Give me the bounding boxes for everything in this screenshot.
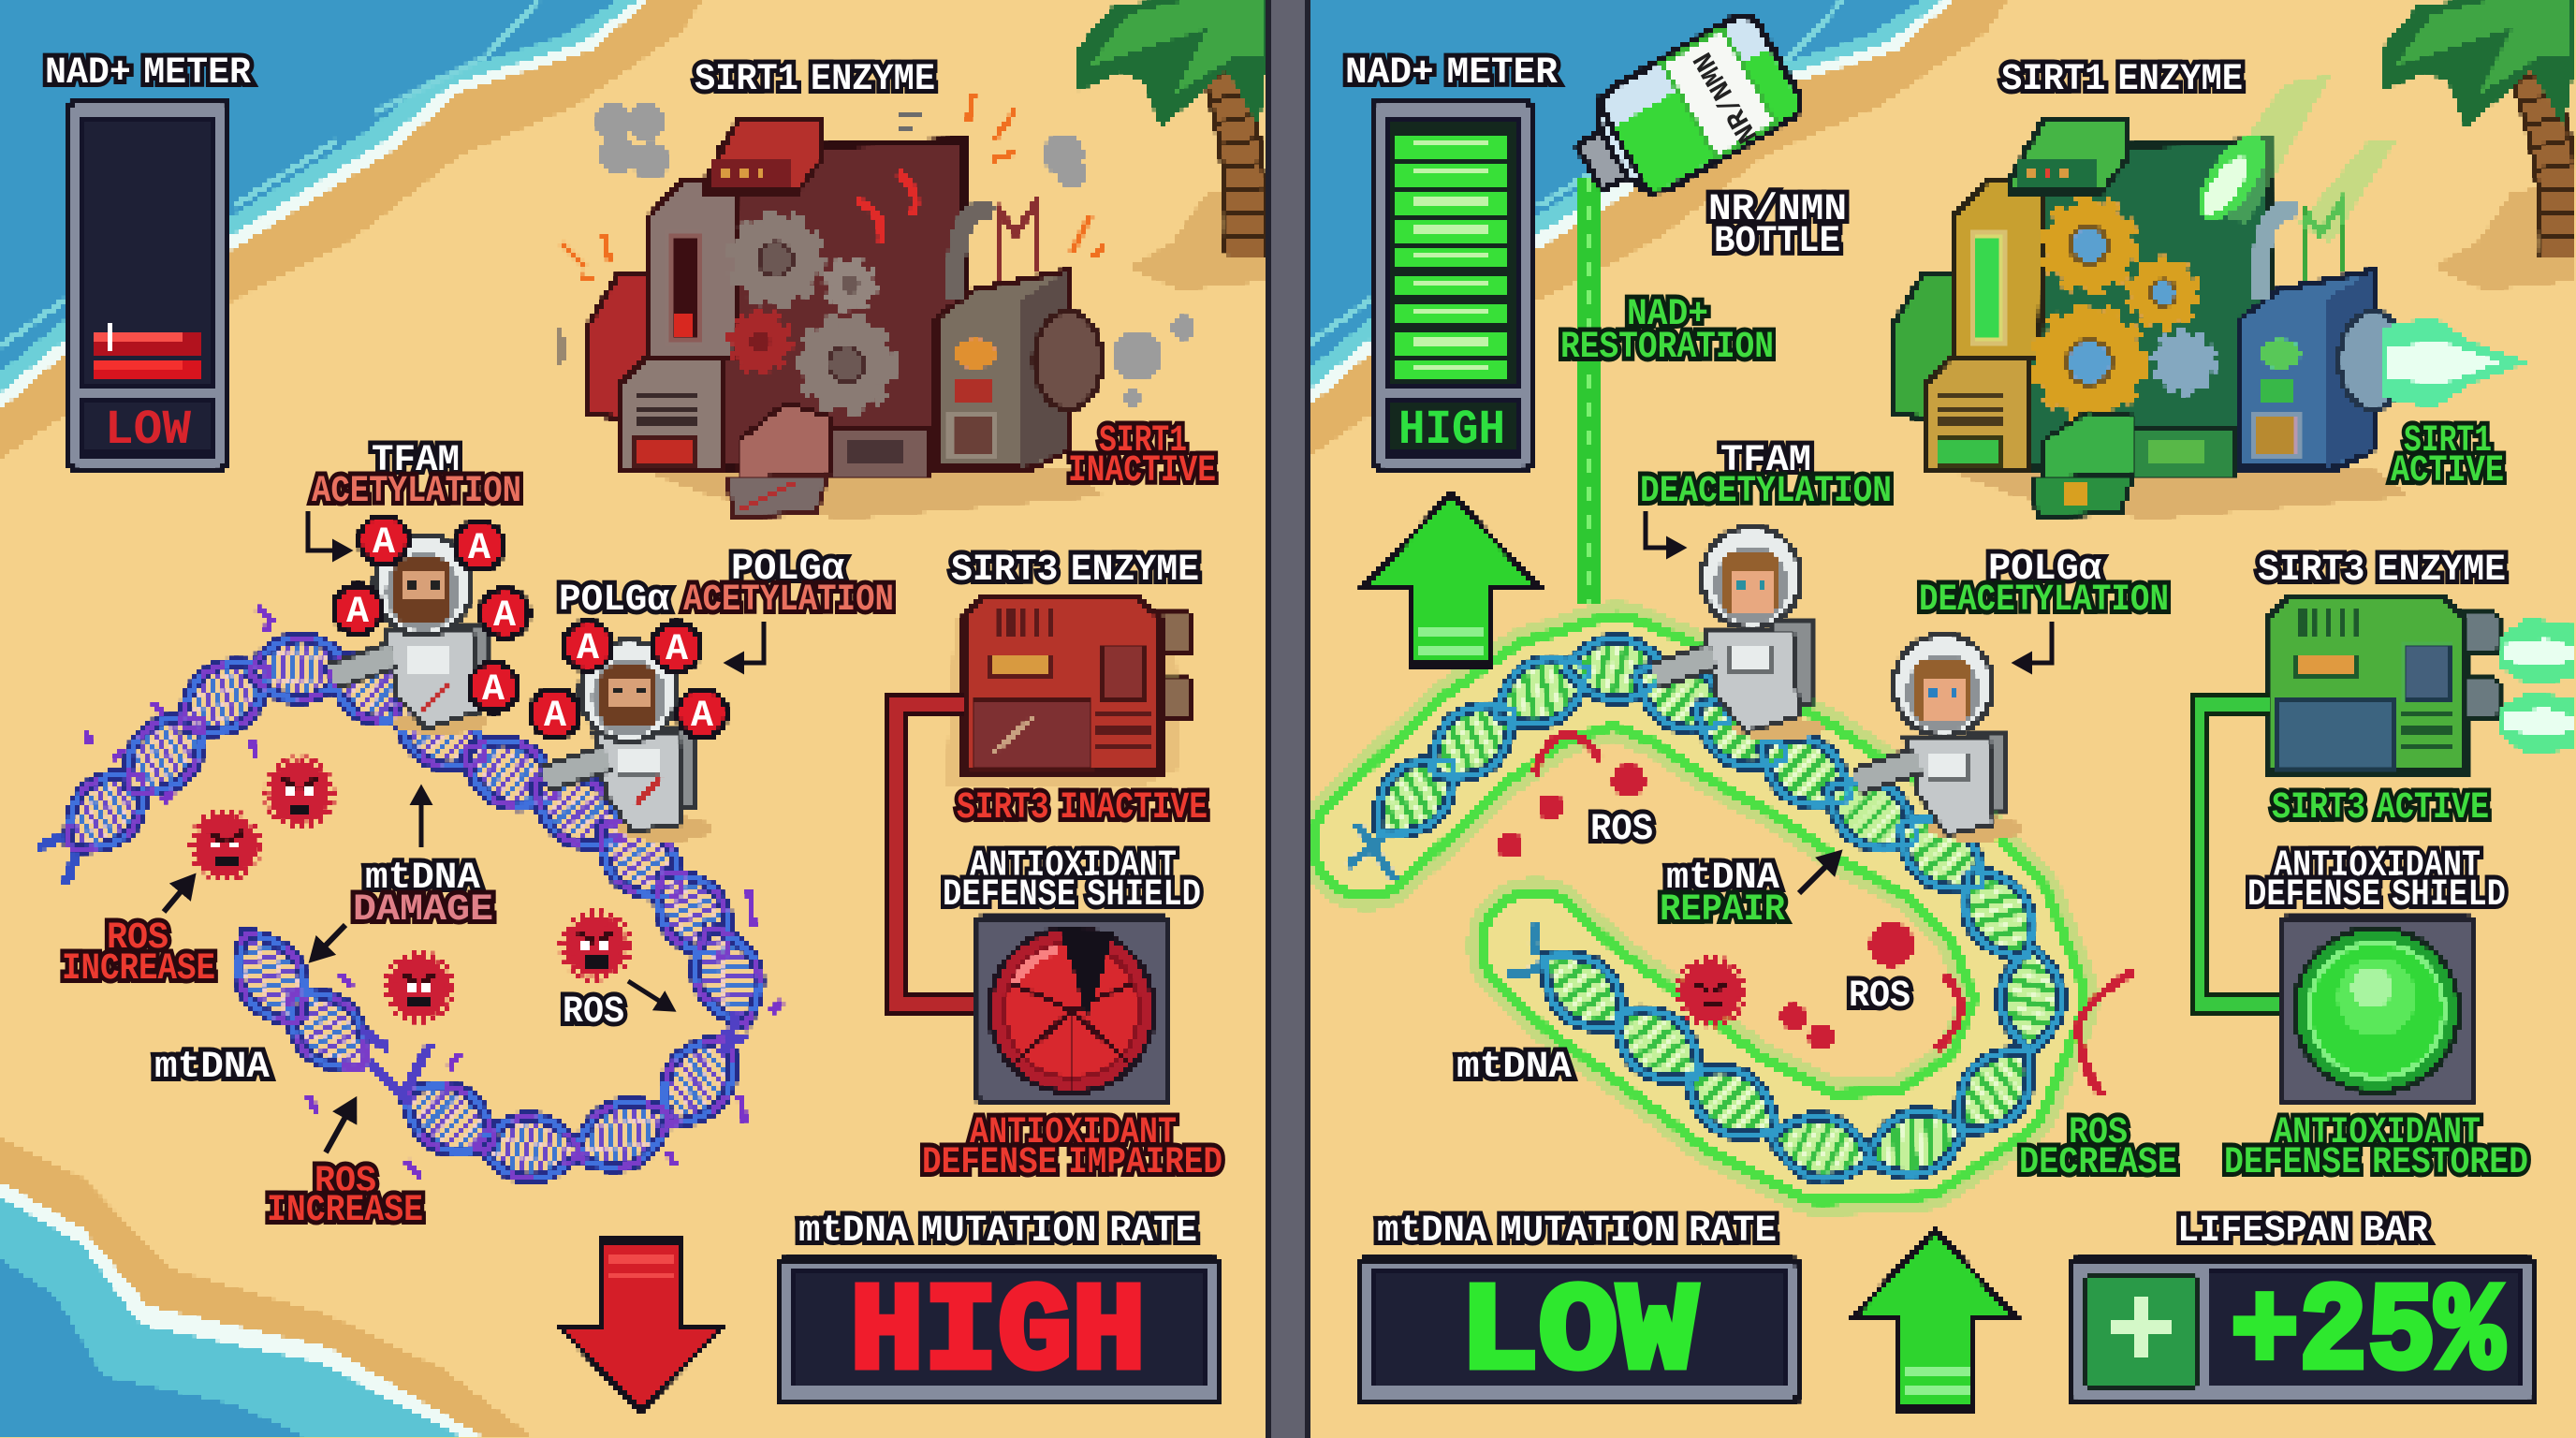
arrow: lower ROS increase <box>326 1108 350 1152</box>
icon: ROS remnants <box>1497 733 2134 1095</box>
arrow: damage up <box>419 796 423 847</box>
label: SIRT1 enzyme: SIRT1 ENZYME <box>2001 59 2243 101</box>
scene: top-left ocean <box>0 0 702 459</box>
icon: ROS monster <box>196 815 256 875</box>
label: SIRT1 inactive: SIRT1 <box>1099 420 1187 462</box>
label: SIRT1 active: SIRT1 <box>2404 420 2492 462</box>
icon: acetyl badges <box>333 516 726 738</box>
scene: bottom-left ocean <box>0 1138 534 1438</box>
icon: ROS monster <box>270 762 329 822</box>
label: mtDNA: mtDNA <box>154 1047 270 1089</box>
label: mtDNA repair <box>1660 858 1785 932</box>
label: ROS decrease: ROS <box>2069 1112 2128 1154</box>
label: POLG alpha deacetylation <box>1919 549 2169 622</box>
label: ROS upper: ROS <box>1590 809 1653 851</box>
panel: right, restored NAD+ state <box>1305 0 2576 1409</box>
label: lifespan bar: LIFESPAN BAR <box>2177 1211 2428 1253</box>
label: TFAM deacetylation <box>1640 440 1892 513</box>
label: ROS lower: ROS <box>1849 976 1910 1018</box>
label: bottle text: NR/NMN <box>1689 46 1765 148</box>
panel: left, low NAD+ state <box>0 0 1268 1438</box>
label: ROS: ROS <box>563 991 624 1034</box>
acetyl badge letters: A <box>577 628 599 670</box>
label: ROS increase: ROS <box>107 917 168 960</box>
icon: plus <box>2112 1299 2170 1357</box>
label: SIRT1 active <box>2391 420 2504 492</box>
label: meter low: LOW <box>105 403 192 458</box>
label: antioxidant defense shield: ANTIOXIDANT <box>970 845 1177 888</box>
label: mtDNA damage: DAMAGE <box>353 889 493 932</box>
illustration layer: right panel <box>1305 0 2576 1409</box>
acetyl badge letters: A <box>346 592 369 634</box>
label: mtDNA repair: mtDNA <box>1666 858 1779 900</box>
icon: SIRT1 enzyme machine, broken <box>558 94 1195 520</box>
label: SIRT1 inactive: INACTIVE <box>1068 450 1216 492</box>
icon: green pipe from SIRT3 to shield <box>2200 706 2278 1005</box>
acetyl badge letters <box>346 522 713 738</box>
label: antioxidant defense shield: DEFENSE SHIELD <box>2247 874 2506 917</box>
label: SIRT3 enzyme: SIRT3 ENZYME <box>951 550 1199 592</box>
icon: machine exhaust jet <box>2382 316 2528 408</box>
value: mutation rate low: LOW <box>1459 1264 1698 1404</box>
arrow: damage to lower strand <box>318 925 345 953</box>
label: antioxidant defense impaired: DEFENSE IMPAIRED <box>922 1142 1222 1184</box>
label: POLG alpha: POLGα <box>559 580 669 622</box>
label: SIRT1 enzyme: SIRT1 ENZYME <box>695 59 935 101</box>
arrow: repair to strand <box>1799 859 1833 893</box>
label: ROS increase lower: INCREASE <box>267 1190 423 1232</box>
label: NAD+ meter: NAD+ METER <box>45 52 251 95</box>
icon: SIRT3 enzyme, inactive <box>945 596 1193 786</box>
label: SIRT3 enzyme: SIRT3 ENZYME <box>2258 550 2506 592</box>
label: TFAM acetylation: ACETYLATION <box>312 471 521 513</box>
label: antioxidant defense impaired <box>922 1112 1222 1184</box>
icon: astronaut TFAM, healthy <box>1655 527 1825 740</box>
acetyl badge letters: A <box>666 629 688 671</box>
label: SIRT1 active: ACTIVE <box>2391 450 2504 492</box>
label: antioxidant defense restored <box>2224 1112 2528 1184</box>
label: TFAM acetylation: TFAM <box>372 440 460 482</box>
value: mutation rate high: HIGH <box>850 1264 1146 1404</box>
acetyl badge letters: A <box>691 696 713 738</box>
label: POLG alpha deacetylation: DEACETYLATION <box>1919 580 2169 622</box>
label: TFAM deacetylation: DEACETYLATION <box>1640 471 1892 513</box>
label: POLG alpha acetylation <box>683 549 894 622</box>
label: TFAM acetylation <box>312 440 521 513</box>
illustration layer: left panel <box>0 0 1268 1438</box>
label: NAD+ restoration: RESTORATION <box>1560 327 1774 369</box>
icon: smoke puffs <box>595 103 1195 406</box>
arrow: ROS increase to monster <box>164 884 187 912</box>
icon: NAD+ meter low <box>66 96 230 472</box>
label: NR/NMN bottle <box>1708 189 1847 263</box>
label: antioxidant defense shield <box>2247 845 2506 917</box>
label: mtDNA mutation rate: mtDNA MUTATION RATE <box>1377 1211 1777 1253</box>
acetyl badge letters: A <box>493 595 516 638</box>
arrow: TFAM pointer <box>1646 511 1676 548</box>
label: NR/NMN bottle: BOTTLE <box>1714 221 1840 263</box>
icon: ROS monster <box>389 957 449 1017</box>
icon: astronaut POLG alpha, acetylated <box>545 640 711 842</box>
label: antioxidant defense impaired: ANTIOXIDANT <box>970 1112 1177 1154</box>
arrow: TFAM pointer <box>308 511 342 550</box>
label: antioxidant defense shield <box>943 845 1201 917</box>
panel: lifespan bar <box>2069 1256 2537 1406</box>
label: NR/NMN bottle: NR/NMN <box>1708 189 1847 231</box>
label: meter high: HIGH <box>1398 403 1505 458</box>
icon: green energy beams <box>2187 75 2396 243</box>
icon: palm tree <box>2381 0 2576 290</box>
label: mtDNA damage: mtDNA <box>365 858 480 900</box>
panel: mutation rate readout low <box>1355 1256 1801 1406</box>
label: antioxidant defense shield: ANTIOXIDANT <box>2274 845 2481 888</box>
label: ROS increase lower: ROS <box>315 1161 376 1203</box>
icon: astronaut TFAM, acetylated <box>332 535 489 734</box>
label: mtDNA: mtDNA <box>1456 1047 1572 1089</box>
label: TFAM deacetylation: TFAM <box>1720 440 1811 482</box>
icon: astronaut POLG alpha, healthy <box>1856 635 2022 842</box>
arrow: POLG pointer <box>735 622 764 663</box>
icon: glowing gold gears <box>2037 202 2212 415</box>
label: ROS increase: INCREASE <box>62 948 215 990</box>
acetyl badge letters: A <box>544 696 566 738</box>
label: SIRT1 inactive <box>1068 420 1216 492</box>
scene: top-right ocean <box>1305 0 2007 459</box>
acetyl badge letters: A <box>482 669 505 712</box>
label: NAD+ restoration: NAD+ <box>1627 294 1708 336</box>
label: antioxidant defense shield: DEFENSE SHIELD <box>943 874 1201 917</box>
icon: NAD+ meter high <box>1370 96 1535 472</box>
icon: red pipe from SIRT3 to shield <box>896 706 973 1005</box>
icon: restored antioxidant shield <box>2282 918 2473 1102</box>
label: ROS decrease: DECREASE <box>2019 1142 2177 1184</box>
label: POLG alpha acetylation: POLGα <box>731 549 844 591</box>
arrow: ROS to strand <box>628 981 666 1005</box>
label: SIRT3 active: SIRT3 ACTIVE <box>2272 787 2489 829</box>
label: mtDNA damage <box>353 858 493 932</box>
label: mtDNA repair: REPAIR <box>1660 889 1785 932</box>
acetyl badge letters: A <box>373 522 395 565</box>
icon: mtDNA debris <box>86 609 782 1178</box>
icon: SIRT1 enzyme machine, active <box>1892 75 2528 520</box>
icon: sparks <box>558 94 1103 365</box>
label: antioxidant defense restored: DEFENSE RESTORED <box>2224 1142 2528 1184</box>
icon: ROS monster <box>565 916 625 976</box>
panel: mutation rate readout high <box>776 1256 1222 1406</box>
icon: NR/NMN bottle <box>1560 8 1808 218</box>
label: POLG alpha deacetylation: POLGα <box>1988 549 2101 591</box>
label: NAD+ meter: NAD+ METER <box>1345 52 1558 95</box>
icon: palm tree <box>1076 0 1268 290</box>
label: mtDNA mutation rate: mtDNA MUTATION RATE <box>798 1211 1197 1253</box>
label: ROS increase lower <box>267 1161 423 1232</box>
icon: cracked antioxidant shield <box>977 918 1168 1102</box>
label: POLG alpha acetylation: ACETYLATION <box>683 580 894 622</box>
icon: SIRT3 enzyme, active <box>2269 596 2576 772</box>
label: SIRT3 inactive: SIRT3 INACTIVE <box>957 787 1208 829</box>
value: lifespan plus 25 percent: +25% <box>2231 1264 2505 1404</box>
arrow: red down arrow <box>560 1240 723 1411</box>
icon: gears <box>732 216 891 409</box>
divider between panels <box>1266 0 1310 1438</box>
label: antioxidant defense restored: ANTIOXIDANT <box>2274 1112 2481 1154</box>
label: NAD+ restoration <box>1560 294 1774 369</box>
arrow: big green up arrow, upper <box>1364 494 1539 665</box>
arrow: big green up arrow, lower <box>1853 1230 2015 1409</box>
label: ROS decrease <box>2019 1112 2177 1184</box>
icon: green NAD+ stream <box>1578 178 1601 604</box>
chart: repaired mtDNA helix with glow <box>1348 637 2063 1190</box>
acetyl badge letters: A <box>468 528 490 570</box>
arrow: POLG pointer <box>2023 622 2052 663</box>
label: ROS increase <box>62 917 215 990</box>
chart: damaged mtDNA helix <box>37 609 782 1185</box>
